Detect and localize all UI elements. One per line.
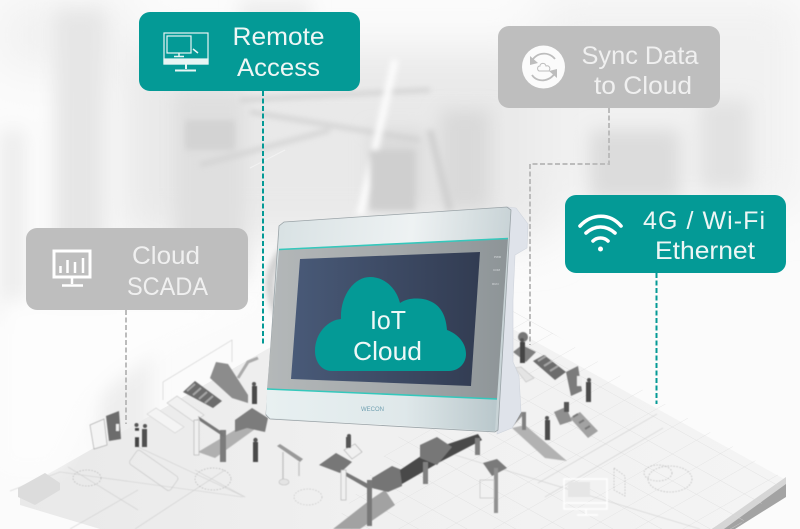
screen [291,252,480,386]
raised block, lower left [18,473,60,505]
status labels: RUN [492,282,498,286]
connector: 4G / Wi-Fi to floor [656,273,658,404]
white haze over upper left of floor [0,300,270,470]
label: 4G / Wi-Fi [643,207,765,235]
isometric factory floor [0,270,786,529]
callout: Sync Data to Cloud: to Cloud [594,72,692,100]
conveyor gantry, lower centre [333,434,482,529]
factory equipment on the floor [90,332,607,529]
outer frame [266,207,511,432]
IoT cloud shape [315,277,466,371]
icon: sync cloud [522,46,565,88]
cloud label: IoT [370,305,406,335]
icon: wifi [580,216,621,252]
status labels: COM [493,268,500,272]
floor plan outlines [10,340,700,529]
icon: chart monitor [54,251,90,286]
callout: 4G / Wi-Fi Ethernet [565,195,786,273]
label: Cloud [132,242,200,270]
robot cell, rear left [147,358,258,433]
callout: 4G / Wi-Fi Ethernet: Ethernet [655,237,755,265]
status labels [492,255,502,286]
lower frame strip [266,389,497,431]
label: Remote [232,23,324,51]
grey bezel [267,238,508,399]
label: Sync Data [582,42,699,70]
robot cell and workers, right [513,332,598,440]
status labels: PWR [494,255,502,259]
cloud label: Cloud [353,336,422,366]
side brackets [497,207,528,434]
crane and forklift, centre [277,434,362,485]
teal accent bottom [267,389,497,399]
callout: Sync Data to Cloud [498,26,720,108]
icon: remote workstation [164,33,208,70]
control cabinets and workers, left [90,411,147,449]
connector: Cloud SCADA to floor [125,310,127,424]
conveyor, lower right of the panel [480,412,567,513]
connector: Sync Data to panel [530,108,609,345]
teal accent top [279,238,508,250]
callout: Cloud SCADA [26,228,248,310]
connector: Remote Access to panel [262,91,264,345]
brand logo: WECON [361,407,384,413]
callout: Remote Access: Access [237,54,320,82]
conveyor gantry, left [194,408,268,462]
callout: Remote Access [139,12,360,91]
callout: Cloud SCADA: SCADA [127,273,208,301]
white workstation outline, lower right [564,479,607,515]
HMI panel device [266,207,528,434]
cloud label [353,305,422,366]
